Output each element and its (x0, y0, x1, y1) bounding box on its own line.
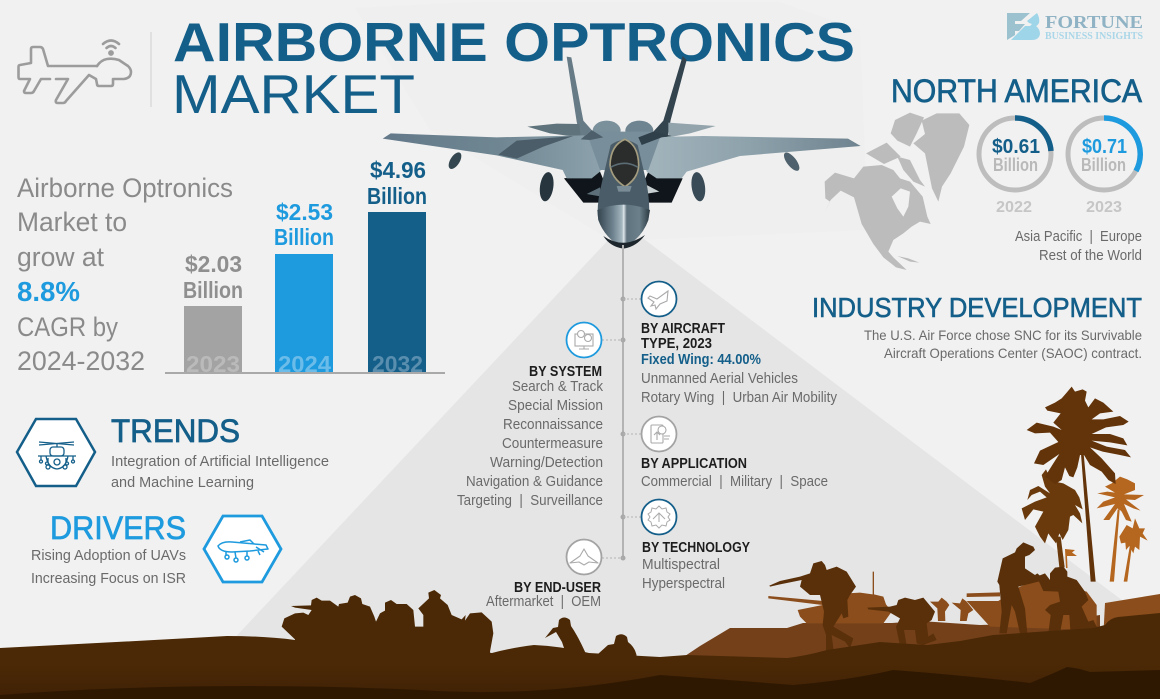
bar 2032: 2032 (372, 351, 423, 377)
icon: drone with signal (18, 40, 131, 103)
icon: system (566, 322, 602, 358)
donut chart 2023: 2023 (1086, 199, 1122, 216)
industry development: INDUSTRY DEVELOPMENT (812, 292, 1142, 323)
trends hexagon icon: helicopter (17, 419, 95, 486)
jet (383, 56, 861, 249)
bar 2024: $2.53 (276, 199, 333, 225)
by system text: Warning/Detection (490, 455, 603, 471)
drivers hexagon icon: drone (204, 516, 281, 582)
bar 2024: 2024 (278, 351, 331, 377)
palm small orange (1119, 518, 1148, 582)
by system text (457, 364, 604, 509)
segmentation timeline (602, 245, 641, 560)
drivers text: DRIVERS (50, 510, 186, 546)
tanks and distant soldiers (768, 572, 973, 623)
icon: application (642, 416, 676, 452)
market growth text: grow at (17, 242, 105, 272)
market growth text: CAGR by (17, 312, 119, 342)
soldier kneeling with pack (867, 598, 937, 646)
by technology text: Hyperspectral (642, 576, 725, 592)
market growth text: Airborne Optronics (17, 173, 233, 203)
by application text (641, 456, 828, 490)
by aircraft type text (641, 321, 838, 406)
by system text: Targeting | Surveillance (457, 493, 603, 509)
bar 2032 (367, 157, 427, 377)
by aircraft type text: Fixed Wing: 44.00% (641, 352, 761, 368)
market growth text: 2024-2032 (17, 346, 145, 376)
bar 2024 (274, 199, 334, 377)
donut chart 2022: Billion (993, 155, 1038, 175)
by technology text: BY TECHNOLOGY (642, 540, 750, 556)
title: MARKET (172, 64, 415, 125)
palm medium brown (1022, 469, 1083, 567)
by system text: Navigation & Guidance (466, 474, 603, 490)
distant soldier two (952, 598, 973, 621)
donut chart 2022 (979, 118, 1051, 216)
bar 2032: Billion (367, 183, 427, 209)
market growth text (17, 173, 233, 376)
industry development (812, 292, 1142, 361)
by application text: BY APPLICATION (641, 456, 747, 472)
donut chart 2023: Billion (1081, 155, 1126, 175)
drivers text: Rising Adoption of UAVs (31, 548, 186, 564)
by end-user text (486, 580, 601, 610)
distant soldier one (930, 598, 949, 621)
by aircraft type text: TYPE, 2023 (641, 336, 712, 352)
bar 2023 (183, 251, 243, 377)
by end-user text: BY END-USER (514, 580, 601, 596)
flag (1065, 549, 1077, 568)
market growth text: 8.8% (17, 276, 80, 307)
icon: end user (566, 540, 602, 574)
logo: Fortune Business Insights: BUSINESS INSIGHTS (1045, 31, 1143, 42)
donut chart 2023 (1068, 118, 1140, 216)
soldier standing (997, 542, 1045, 633)
landscape: back hills (685, 594, 1160, 699)
donut chart 2022: $0.61 (992, 136, 1040, 158)
bar 2024: Billion (274, 224, 334, 250)
by system text: Reconnaissance (503, 417, 603, 433)
map: north america (823, 113, 969, 270)
trends text (111, 413, 329, 491)
soldier aiming (769, 561, 856, 653)
by technology text (642, 540, 750, 592)
by end-user text: Aftermarket | OEM (486, 594, 601, 610)
by system text: BY SYSTEM (529, 364, 602, 380)
industry development: Aircraft Operations Center (SAOC) contract. (884, 345, 1142, 361)
bar 2032: $4.96 (370, 157, 426, 183)
by aircraft type text: BY AIRCRAFT (641, 321, 725, 337)
donut chart 2023: $0.71 (1082, 136, 1127, 158)
icon: aircraft type (642, 282, 676, 316)
drivers text: Increasing Focus on ISR (31, 571, 186, 587)
logo: Fortune Business Insights: FORTUNE (1045, 12, 1143, 32)
by application text: Commercial | Military | Space (641, 474, 828, 490)
soldiers in boat (282, 590, 493, 660)
by technology text: Multispectral (642, 557, 720, 573)
bar 2023: Billion (183, 277, 243, 303)
market growth text: Market to (17, 207, 127, 237)
north america heading: NORTH AMERICA (891, 73, 1143, 109)
bar chart (165, 157, 445, 377)
other regions: Asia Pacific | Europe (1015, 229, 1142, 245)
tank left (768, 572, 892, 623)
bar 2023: 2023 (186, 351, 240, 377)
bar 2023: $2.03 (185, 251, 242, 277)
industry development: The U.S. Air Force chose SNC for its Survivable (864, 327, 1142, 343)
drivers text (31, 510, 186, 587)
by system text: Search & Track (512, 379, 604, 395)
title: AIRBORNE OPTRONICS (173, 12, 855, 73)
donut chart 2022: 2022 (996, 199, 1032, 216)
jet backdrop haze (355, 2, 868, 240)
trends text: TRENDS (111, 413, 240, 449)
by system text: Countermeasure (502, 436, 603, 452)
by aircraft type text: Unmanned Aerial Vehicles (641, 371, 798, 387)
palm large brown (1027, 387, 1131, 582)
title divider (150, 32, 152, 107)
tank right (967, 580, 1097, 630)
landscape: foreground ground (0, 613, 1160, 699)
soldier kneeling right (1037, 567, 1098, 635)
soldiers lower centre (545, 618, 637, 658)
other regions (1015, 229, 1142, 264)
other regions: Rest of the World (1039, 248, 1142, 264)
title (172, 12, 855, 125)
soldier crouching left (545, 618, 586, 654)
trends text: Integration of Artificial Intelligence (111, 454, 329, 470)
light beam triangle (225, 236, 1135, 699)
by system text: Special Mission (508, 398, 603, 414)
trends text: and Machine Learning (111, 475, 254, 491)
icon: technology (642, 500, 676, 534)
soldier crouching right (598, 634, 637, 658)
palm medium orange (1097, 477, 1144, 582)
logo mark (1007, 13, 1040, 40)
landscape: palm trees (1022, 387, 1148, 582)
logo: Fortune Business Insights (1007, 12, 1143, 42)
by aircraft type text: Rotary Wing | Urban Air Mobility (641, 390, 838, 406)
